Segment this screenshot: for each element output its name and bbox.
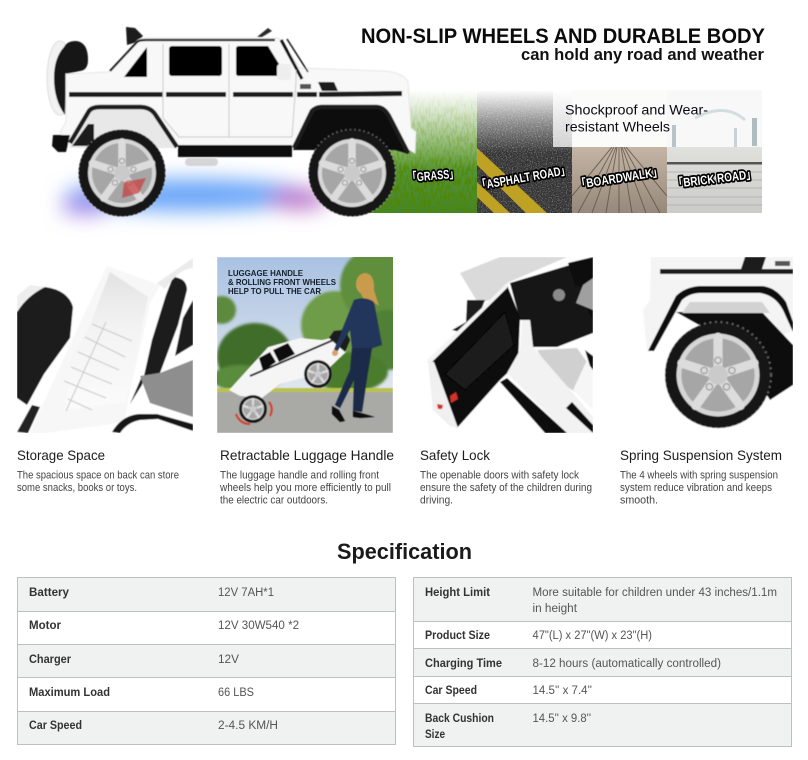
row: charger: 12V	[218, 654, 239, 666]
row: charging time: Charging Time	[425, 658, 502, 670]
callout: shockproof wheels	[565, 102, 708, 134]
wheel arches	[70, 106, 409, 154]
row: product size: Product Size	[425, 630, 490, 642]
row: battery: 12V 7AH*1	[218, 587, 274, 599]
feature text: the electric car outdoors.	[220, 494, 328, 506]
row: battery: Battery	[29, 587, 70, 599]
feature text: wheels help you more efficiently to pull	[219, 482, 391, 494]
section heading: specification: Specification	[337, 539, 472, 564]
feature text	[420, 470, 592, 506]
photo caption text: LUGGAGE HANDLE	[228, 269, 304, 278]
row: back cushion size	[425, 713, 591, 741]
table: specification left	[17, 577, 396, 744]
translucent caption backdrop	[553, 90, 667, 147]
row: car speed	[29, 720, 278, 732]
feature text: ensure the safety of the children during	[420, 482, 592, 494]
subheading: can hold any road and weather	[521, 45, 764, 64]
feature text	[219, 470, 391, 506]
row: charger: Charger	[29, 654, 71, 666]
road labels: 「BRICK ROAD」	[673, 167, 757, 191]
windows	[124, 46, 279, 77]
road photo: boardwalk	[572, 90, 667, 213]
feature: spring suspension system	[620, 447, 782, 506]
feature text: some snacks, books or toys.	[17, 482, 137, 494]
row: car speed	[425, 685, 592, 697]
panel: road surfaces banner	[365, 90, 762, 213]
row: car speed: Car Speed	[29, 720, 82, 732]
feature text: The spacious space on back can store	[17, 470, 179, 482]
feature: safety lock	[420, 447, 592, 506]
callout: shockproof wheels: Shockproof and Wear-	[565, 102, 708, 118]
photo: storage space	[17, 257, 193, 433]
heading: NON-SLIP WHEELS AND DURABLE BODY	[361, 24, 765, 48]
road photo: brick road	[667, 90, 762, 213]
feature text: system reduce vibration and keeps	[620, 482, 772, 494]
photo: luggage handle	[217, 257, 393, 433]
headrest and roof bar	[126, 27, 272, 45]
row: maximum load	[29, 687, 254, 699]
row: product size: 47"(L) x 27"(W) x 23"(H)	[532, 630, 652, 642]
spare tire	[47, 41, 88, 115]
photo: safety lock	[417, 257, 593, 433]
feature text: The openable doors with safety lock	[420, 470, 579, 482]
car body	[60, 38, 416, 153]
row: height limit	[425, 587, 777, 615]
road photo: asphalt	[477, 90, 572, 213]
feature text: The luggage handle and rolling front	[220, 470, 379, 482]
side stripe and door lines	[69, 44, 402, 137]
feature: storage space	[17, 447, 179, 494]
row: height limit: Height Limit	[425, 587, 490, 599]
photo caption text: & ROLLING FRONT WHEELS	[228, 278, 337, 287]
row: motor: 12V 30W540 *2	[218, 620, 299, 632]
road labels: 「GRASS」	[407, 167, 459, 185]
row: car speed: 14.5'' x 7.4''	[532, 685, 592, 697]
row: charging time: 8-12 hours (automatically controlled)	[532, 658, 721, 670]
tilted mini car	[229, 330, 350, 424]
callout: shockproof wheels: resistant Wheels	[565, 118, 670, 134]
row: back cushion size: 14.5'' x 9.8''	[532, 713, 591, 725]
icon: white ride-on car side view	[47, 27, 416, 216]
row: motor	[29, 620, 299, 632]
row: charging time	[425, 658, 721, 670]
feature: safety lock: Safety Lock	[420, 447, 491, 463]
row: car speed: 2-4.5 KM/H	[218, 720, 278, 732]
feature: retractable luggage handle	[219, 447, 394, 506]
wheels	[78, 130, 396, 216]
feature text: smooth.	[620, 494, 658, 506]
row: battery	[29, 587, 274, 599]
feature text: The 4 wheels with spring suspension	[620, 470, 778, 482]
feature: retractable luggage handle: Retractable Luggage Handle	[220, 447, 394, 463]
photo caption text	[228, 270, 336, 294]
heading	[361, 24, 765, 64]
row: height limit: More suitable for children under 43 inches/1.1m	[532, 587, 777, 599]
road labels	[407, 163, 757, 193]
photo: spring suspension	[644, 257, 793, 429]
road labels: 「BOARDWALK」	[575, 165, 663, 192]
row: maximum load: 66 LBS	[218, 687, 254, 699]
feature text	[620, 470, 778, 506]
row: back cushion size: Size	[425, 729, 445, 741]
row: car speed: Car Speed	[425, 685, 477, 697]
road labels: 「ASPHALT ROAD」	[476, 163, 571, 193]
photo caption text: HELP TO PULL THE CAR	[228, 287, 321, 296]
feature: storage space: Storage Space	[17, 447, 105, 463]
feature text: driving.	[420, 494, 453, 506]
road photo: grass	[365, 90, 477, 213]
mirror	[277, 64, 291, 80]
feature text	[17, 470, 179, 494]
roof trim and windshield	[110, 39, 308, 79]
woman pulling	[332, 273, 382, 422]
row: motor: Motor	[29, 620, 62, 632]
feature: spring suspension system: Spring Suspension System	[620, 447, 782, 463]
row: charger	[29, 654, 239, 666]
coloured glow under car	[61, 179, 328, 215]
row: product size	[425, 630, 652, 642]
table: specification right	[413, 577, 792, 746]
row: back cushion size: Back Cushion	[425, 713, 494, 725]
row: height limit: in height	[532, 603, 578, 615]
row: maximum load: Maximum Load	[29, 687, 110, 699]
exhaust	[185, 158, 218, 166]
rear bumper and sill	[52, 135, 292, 157]
